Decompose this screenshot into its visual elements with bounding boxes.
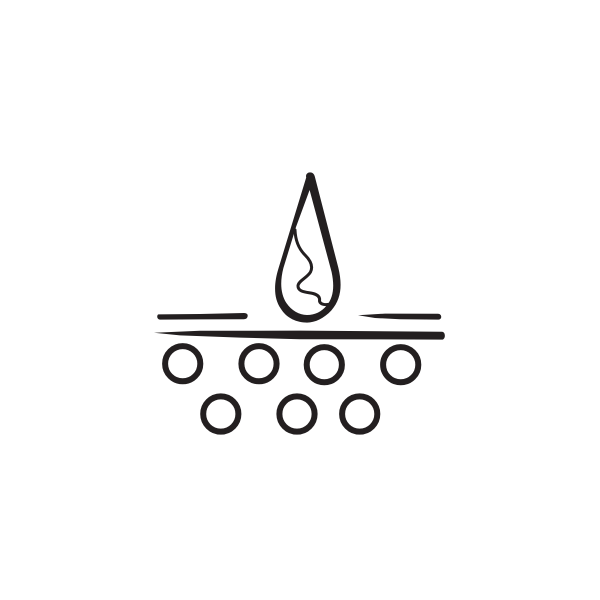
particle 5 xyxy=(203,396,238,432)
particle 3 xyxy=(307,347,342,382)
surface: upper right line xyxy=(358,314,441,320)
particle 7 xyxy=(342,396,377,432)
particles: upper row xyxy=(165,346,418,382)
surface: upper left line xyxy=(157,313,248,320)
particle 1 xyxy=(165,346,200,381)
drop highlight squiggle xyxy=(295,230,332,305)
particle 6 xyxy=(279,396,315,432)
particle 4 xyxy=(383,347,418,382)
particle 2 xyxy=(241,346,277,381)
particles: lower row xyxy=(203,396,377,432)
icon: water drop xyxy=(275,172,341,323)
surface: main long line xyxy=(154,331,445,340)
